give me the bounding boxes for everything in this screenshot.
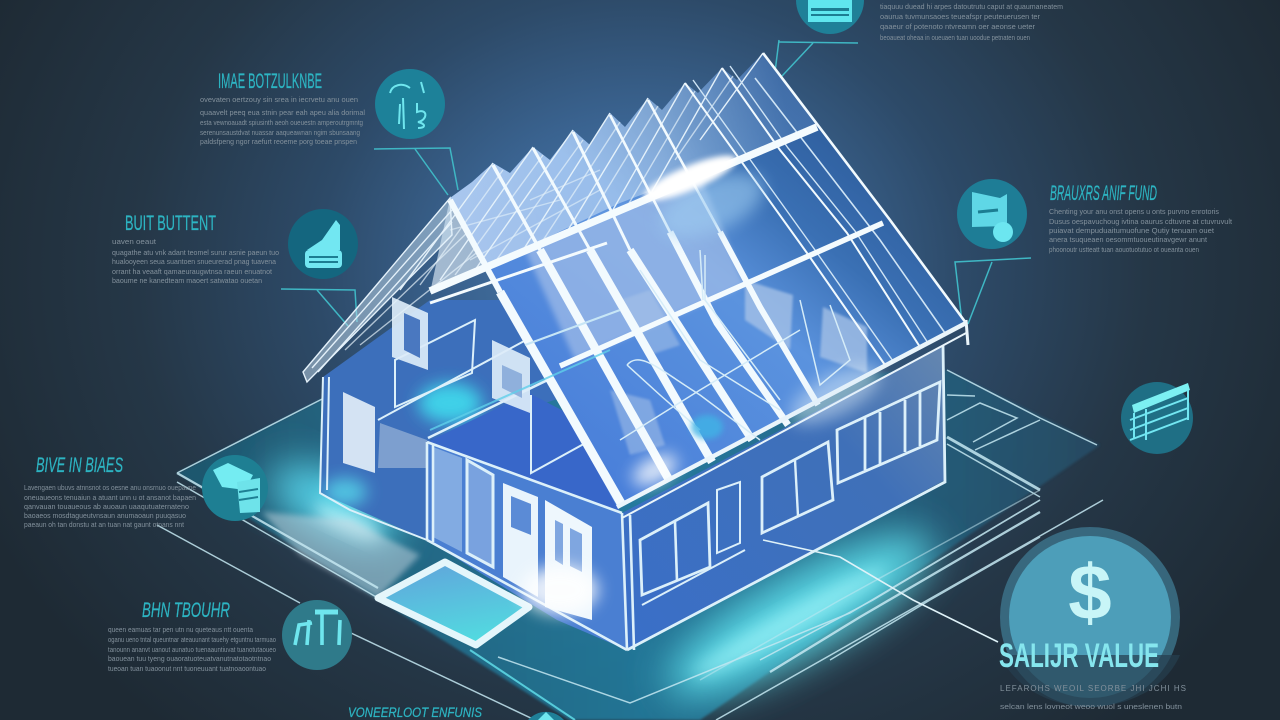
porch floor bbox=[378, 562, 529, 645]
body text: ovevaten oertzouy sin srea in iecrvetu anu ouen bbox=[200, 95, 358, 104]
glow: ground cyan right bbox=[649, 507, 951, 720]
wall outlines bbox=[320, 300, 945, 650]
panel: top-left callout bbox=[200, 69, 445, 146]
heading: BHN TBOUHR bbox=[142, 599, 230, 622]
body text bbox=[880, 2, 1063, 42]
body text: Dusus oespavuchoug ivtina oaurus cdtuvne at ctuvruvult bbox=[1049, 217, 1233, 226]
window block near rafter bbox=[492, 340, 530, 413]
body text: esta vewnoauadt spiusinth aeoh oueuestn amperoutrgmntg bbox=[200, 118, 363, 127]
body text: beoaueat oheaa in oueuaen tuan uoodue petnaten ouen bbox=[880, 33, 1030, 42]
body text: Lavengaen ubuvs atnnsnot os oesne anu onsrnuo ouepaune bbox=[24, 483, 196, 492]
rafters bbox=[450, 53, 966, 505]
glass band bbox=[262, 512, 420, 598]
body text: baouean tuu tyeng ouaoratuoteuatvanutnatotaotntnao bbox=[108, 654, 271, 663]
body text: anera tsuqueaen oesommtuoueutinavgewr anunt bbox=[1049, 235, 1208, 244]
house bbox=[303, 53, 968, 650]
roof plane bbox=[450, 53, 966, 507]
front door 2 bbox=[545, 500, 592, 620]
body text: oneuaueons tenuaiun a atuant unn u ot ansanot bapaen bbox=[24, 493, 196, 502]
left door bbox=[343, 392, 375, 473]
front door 1 bbox=[503, 483, 538, 597]
front window pane bbox=[467, 460, 493, 567]
icon: panel bbox=[796, 0, 864, 34]
body text: uaven oeaut bbox=[112, 237, 157, 246]
icon: shingle bbox=[288, 209, 358, 279]
outer ring bbox=[1000, 527, 1180, 707]
body text: oganu ueno tntal queuntnar ateauunant tauehy etguntnu tarmuao bbox=[108, 635, 276, 644]
value heading: SALIJR VALUE bbox=[999, 637, 1159, 675]
panel: right callout bbox=[957, 179, 1233, 254]
glow: ground cyan core bbox=[688, 558, 892, 686]
body text: paeaun oh tan donstu at an tuan nat gaunt otnans nnt bbox=[24, 520, 185, 529]
glow: wall base bbox=[323, 478, 367, 506]
body text: puiavat dempuduaitumuofune Qutiy tenuam ouet bbox=[1049, 226, 1215, 235]
glass floor pane bbox=[378, 423, 427, 468]
body text: qaaeur of potenoto ntvreamn oer aeonse ueter bbox=[880, 22, 1036, 31]
panel: left roof callout bbox=[112, 209, 358, 285]
porch frame bbox=[378, 562, 529, 645]
interior floor bbox=[427, 393, 619, 517]
roof light panels bbox=[610, 280, 867, 455]
ground plate bbox=[157, 360, 1103, 720]
callout line to value bbox=[763, 540, 998, 642]
body text: oaurua tuvmunsaoes teueafspr peuteuerusen ter bbox=[880, 12, 1040, 21]
body text: qanvauan touaueous ab auoaun uaaqutuaternateno bbox=[24, 502, 189, 511]
cyan roof spot bbox=[691, 415, 723, 439]
upper wall window bbox=[392, 297, 428, 370]
icon: document bbox=[957, 179, 1027, 249]
heading: IMAE BOTZULKNBE bbox=[218, 70, 322, 93]
body text: Chenting your anu onst opens u onts purvno enrotoris bbox=[1049, 207, 1219, 216]
icon: bottom badge bbox=[528, 712, 564, 720]
body text bbox=[1049, 207, 1233, 254]
heading: VONEERLOOT ENFUNIS bbox=[348, 704, 483, 720]
body text: tiaquuu duead hi arpes datoutrutu caput at quaumaneatem bbox=[880, 2, 1063, 11]
panel: right callout: BRAUXRS ANIF FUND bbox=[1050, 182, 1157, 205]
lower disc shade bbox=[1000, 655, 1180, 707]
icon: insulation block bbox=[202, 455, 268, 521]
lower rafter glow bbox=[628, 448, 682, 492]
body text: serenunsaustdvat nuassar aaqueawnan ngim sbunsaang bbox=[200, 128, 360, 137]
door glow bbox=[522, 566, 598, 614]
flare bbox=[651, 160, 773, 250]
body text: queen eamuas tar pen utn nu queteaus ntt ouenta bbox=[108, 625, 254, 634]
body text: quagathe atu vnk adant teomel surur asnie paeun tuo bbox=[112, 248, 279, 257]
body text: baoaeos mosdtagueutvnsaun anumaoaun puuqasuo bbox=[24, 511, 186, 520]
panel: left lower callout bbox=[24, 454, 268, 529]
body text bbox=[112, 237, 279, 285]
roof interior sketch lines bbox=[620, 250, 850, 440]
roof corner glow bbox=[781, 354, 889, 436]
roof lavender band bbox=[525, 175, 745, 360]
eave bbox=[617, 320, 968, 518]
flare core bbox=[639, 147, 741, 209]
dollar sign: $ bbox=[1068, 548, 1112, 636]
body text: paldsfpeng ngor raefurt reoeme porg toeae pnspen bbox=[200, 137, 357, 146]
body text: baoume ne kanedteam maoert satwatao ouetan bbox=[112, 276, 262, 285]
icon: plumbing bbox=[375, 69, 445, 139]
panel: lower-left callout bbox=[108, 599, 352, 673]
inner disc bbox=[1009, 536, 1171, 698]
body text: tanounn ananvt uanout aunatuo tuenaauntiuvat tuanotutaoueo bbox=[108, 645, 276, 654]
left gable wall bbox=[320, 300, 570, 540]
roof upper translucent band bbox=[430, 53, 817, 293]
heading: BIVE IN BIAES bbox=[36, 454, 123, 477]
glow: ground white-cyan core bbox=[311, 498, 385, 546]
icon: tools bbox=[282, 600, 352, 670]
body text bbox=[200, 95, 365, 146]
body text: tueoan tuan tuaoonut nnt tuoneuuant tuatnoaoontuao bbox=[108, 664, 266, 673]
panel: value badge bbox=[999, 527, 1186, 711]
purlins bbox=[430, 127, 883, 430]
body text: hualooyeen seua suantoen snueurerad pnag tuavena bbox=[112, 257, 277, 266]
leader lines bbox=[281, 40, 1031, 326]
body text: orrant ha veaaft qamaeuraugwtnsa raeun enuatnot bbox=[112, 267, 273, 276]
panel: bottom callout bbox=[348, 704, 564, 720]
body text: quaavelt peeq eua stnin pear eah apeu alia dorimal bbox=[200, 108, 365, 117]
front pale pane bbox=[433, 447, 462, 552]
left roof slope bbox=[303, 53, 763, 382]
icon: lumber stack bbox=[1121, 382, 1193, 454]
glow: ground cyan left bbox=[259, 448, 411, 562]
heading: BUIT BUTTENT bbox=[125, 212, 216, 235]
value body text bbox=[1000, 684, 1186, 711]
plate outline bbox=[157, 360, 1103, 720]
body text bbox=[24, 483, 196, 529]
right wall bbox=[622, 345, 945, 650]
body text bbox=[108, 625, 276, 673]
body text: phoonoutr ustteatt tuan aouotuotutuo ot oueanta ouen bbox=[1049, 245, 1199, 254]
value body text: selcan lens lovneot weoo wuol s uneslenen butn bbox=[1000, 702, 1182, 711]
panel: top-right callout bbox=[796, 0, 1063, 42]
value body text: LEFAROHS WEOIL SEORBE JHI JCHI HS bbox=[1000, 684, 1186, 693]
glow: wall spot bbox=[418, 383, 482, 423]
front wall bbox=[427, 442, 627, 650]
